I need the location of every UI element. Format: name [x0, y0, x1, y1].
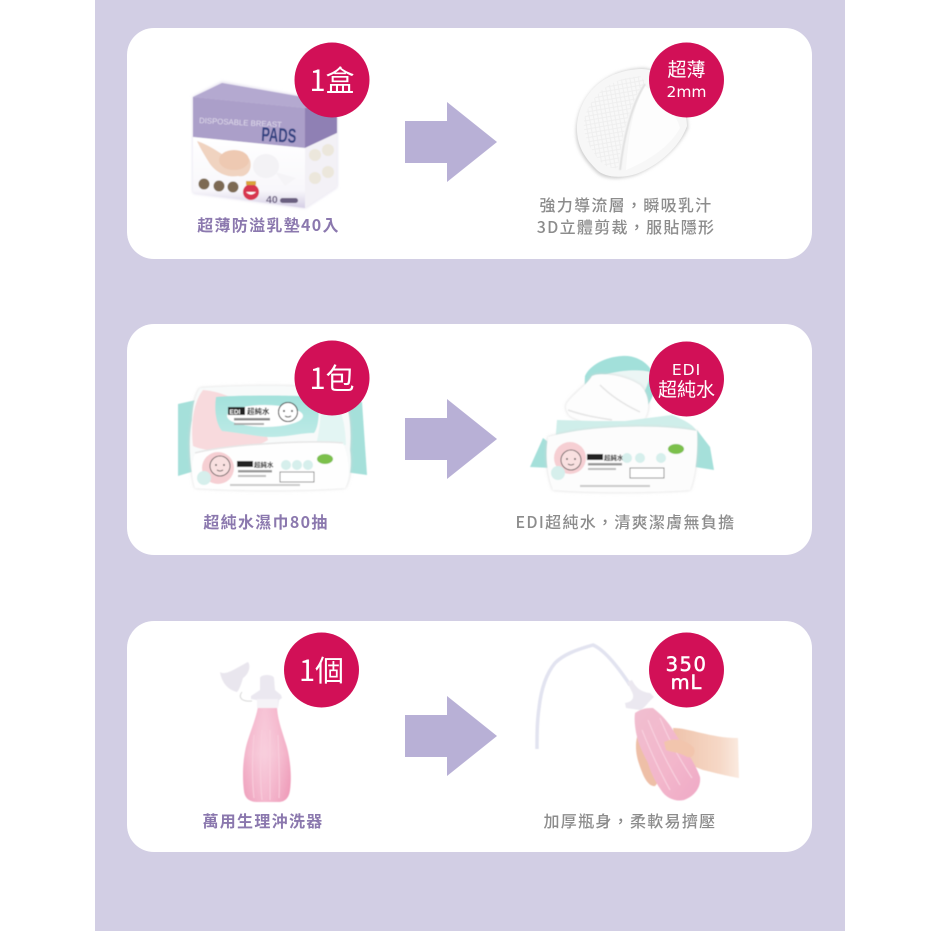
product: open wet wipes pack	[530, 356, 714, 492]
arrow	[405, 399, 497, 479]
product: breast pad box: DISPOSABLE BREAST	[199, 116, 282, 129]
description: absorption and fit: 3D立體剪裁，服貼隱形	[537, 214, 715, 238]
label: ultra thin pads 40 pieces: 超薄防溢乳墊40入	[197, 212, 340, 236]
product: wet wipes pack: 超純水	[247, 406, 270, 417]
arrow	[405, 696, 497, 776]
badge: 1 piece	[284, 632, 359, 708]
badge: 1 pack: 1包	[309, 356, 355, 398]
product: single breast pad	[576, 68, 688, 178]
description: absorption and fit	[537, 192, 715, 238]
product: hand squeezing bottle	[537, 645, 739, 801]
description: pure water, no burden: EDI超純水，清爽潔膚無負擔	[516, 509, 735, 533]
product: breast pad box	[193, 82, 337, 208]
label: pure water wipes 80 sheets: 超純水濕巾80抽	[203, 509, 329, 533]
badge: 350 mL: mL	[671, 671, 702, 694]
product: open wet wipes pack: 超純水	[604, 452, 624, 462]
badge: 350 mL	[649, 632, 724, 708]
badge: 1 pack	[294, 340, 370, 416]
description: absorption and fit: 強力導流層，瞬吸乳汁	[539, 192, 713, 216]
badge: 350 mL: 350	[666, 653, 707, 676]
product: breast pad box: 40	[266, 194, 278, 206]
badge: EDI pure water: EDI	[672, 361, 701, 379]
panel: breast pads	[127, 28, 812, 259]
background panel	[95, 0, 845, 931]
badge: EDI pure water	[649, 342, 724, 416]
panel: irrigation bottle	[127, 621, 812, 852]
panel: wet wipes	[127, 324, 812, 555]
badge: ultra thin 2mm	[649, 42, 724, 118]
badge: EDI pure water: 超純水	[658, 375, 715, 402]
description: thick bottle, soft squeeze: 加厚瓶身，柔軟易擠壓	[543, 808, 717, 832]
badge: 1 box	[294, 42, 370, 118]
product: wet wipes pack	[178, 386, 367, 490]
water stream	[537, 645, 630, 749]
product: pink rinse bottle	[220, 662, 291, 802]
product: breast pad box: PADS	[261, 124, 297, 148]
product: wet wipes pack: EDI	[230, 409, 241, 416]
badge: 1 piece: 1個	[299, 648, 344, 690]
badge: ultra thin 2mm: 超薄	[667, 55, 706, 82]
arrow	[405, 102, 497, 182]
label: universal rinse bottle: 萬用生理沖洗器	[202, 808, 324, 832]
badge: 1 box: 1盒	[309, 58, 355, 100]
product: wet wipes pack: 超純水	[254, 459, 274, 469]
badge: ultra thin 2mm: 2mm	[666, 83, 707, 101]
